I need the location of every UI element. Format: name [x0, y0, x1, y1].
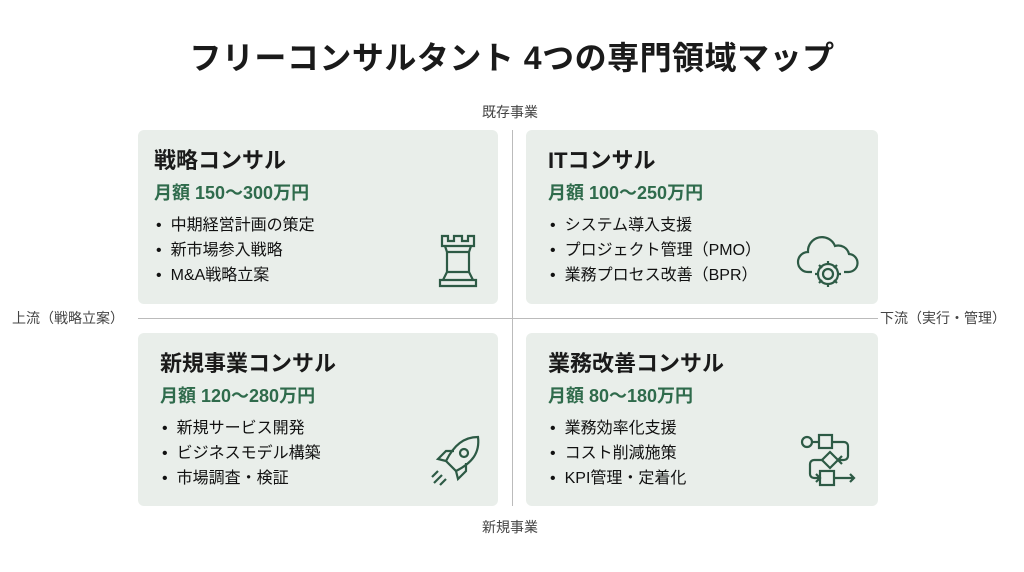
axis label right: 下流（実行・管理）	[880, 310, 1006, 326]
heading: 戦略コンサル	[154, 148, 286, 173]
bullet list	[162, 419, 321, 487]
bullet list	[156, 216, 315, 284]
panel: IT	[526, 130, 878, 304]
bullet list: KPI管理・定着化	[565, 470, 686, 487]
axis label bottom: 新規事業	[482, 519, 538, 535]
bullet list	[550, 216, 761, 284]
panel: new business	[138, 333, 498, 506]
panel: strategy	[138, 130, 498, 304]
heading: ITコンサル	[548, 148, 656, 173]
bullet list: M&A戦略立案	[171, 267, 269, 284]
price: 月額 100〜250万円	[548, 183, 703, 203]
price: 月額 80〜180万円	[548, 386, 693, 406]
bullet list: 業務プロセス改善（BPR）	[565, 267, 758, 284]
bullet list: 市場調査・検証	[177, 470, 289, 487]
icon: rocket	[431, 436, 480, 486]
bullet list: コスト削減施策	[565, 445, 677, 462]
title: フリーコンサルタント 4つの専門領域マップ	[189, 40, 835, 76]
bullet list: プロジェクト管理（PMO）	[565, 242, 761, 259]
icon: chess rook	[438, 234, 478, 288]
bullet list: ビジネスモデル構築	[177, 445, 321, 462]
axis label top: 既存事業	[482, 104, 538, 120]
bullet list: 新規サービス開発	[177, 420, 305, 437]
bullet list	[550, 419, 686, 487]
heading: 業務改善コンサル	[548, 351, 724, 376]
icon: cloud gear	[796, 236, 859, 287]
bullet list: 新市場参入戦略	[171, 242, 283, 259]
bullet list: 業務効率化支援	[565, 420, 677, 437]
bullet list: システム導入支援	[565, 217, 692, 234]
bullet list: 中期経営計画の策定	[171, 217, 315, 234]
price: 月額 120〜280万円	[160, 386, 315, 406]
icon: flowchart	[800, 434, 856, 486]
axis label left: 上流（戦略立案）	[12, 310, 124, 326]
heading: 新規事業コンサル	[160, 351, 336, 376]
panel: operations improvement	[526, 333, 878, 506]
price: 月額 150〜300万円	[154, 183, 309, 203]
